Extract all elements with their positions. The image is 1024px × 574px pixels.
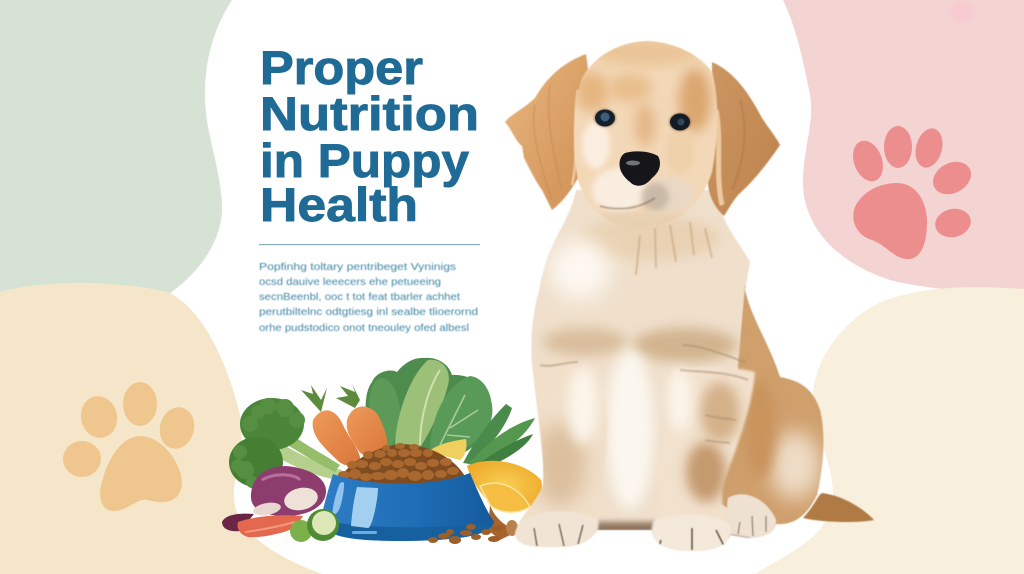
- broccoli: [229, 398, 342, 488]
- cheeks and muzzle: [582, 121, 610, 169]
- illustration: golden retriever puppy: [500, 35, 874, 560]
- text block: description: [259, 261, 478, 334]
- carrots: [301, 384, 387, 466]
- belly: [606, 350, 654, 510]
- title: Nutrition: [260, 87, 479, 140]
- icon: pink paw print: [848, 125, 977, 259]
- left front paw: [512, 511, 598, 550]
- neck fur: [580, 216, 720, 260]
- kibble mound: [338, 443, 466, 486]
- panel: pink blob top right: [783, 0, 1024, 293]
- spilled kibble: [428, 520, 518, 544]
- blue bowl: [320, 473, 494, 541]
- text block: description: ocsd dauive leeecers ehe petueeing: [259, 276, 441, 288]
- citrus slices: [428, 439, 542, 540]
- icon: tan paw print: [63, 382, 199, 511]
- vegetable slices: [222, 509, 339, 542]
- right ear: [708, 62, 780, 216]
- text block: description: secnBeenbl, ooc t tot feat tbarler achhet: [259, 291, 460, 303]
- title: in Puppy: [260, 134, 469, 187]
- chest shading: [543, 328, 627, 356]
- head: [573, 40, 718, 222]
- title: Proper: [260, 41, 423, 94]
- left foreleg: [531, 405, 608, 530]
- title: Health: [260, 178, 418, 231]
- puppy body: [514, 190, 824, 552]
- leafy greens: [366, 358, 535, 470]
- right foreleg: [654, 367, 756, 522]
- fur lines: [540, 345, 748, 443]
- panel: cream blob bottom left: [0, 283, 322, 574]
- tail: [803, 493, 874, 522]
- purple onion: [251, 466, 326, 517]
- left eye: [594, 109, 616, 127]
- nose: [619, 151, 660, 186]
- panel: cream blob bottom right: [755, 287, 1024, 574]
- decorative pink spot: [950, 1, 974, 23]
- text block: description: perutbiltelnc odtgtiesg inl sealbe tlioerornd: [259, 306, 478, 318]
- right front paw: [650, 515, 731, 553]
- back paw: [727, 494, 776, 539]
- right eye: [669, 113, 691, 131]
- panel: green blob top left: [0, 0, 232, 293]
- text block: description: orhe pudstodico onot tneouley ofed albesl: [259, 322, 469, 334]
- divider: [259, 244, 480, 245]
- text block: description: Popfinhg toltary pentribeget Vyninigs: [259, 261, 456, 273]
- title: [260, 41, 479, 231]
- illustration: food bowl with vegetables: [222, 358, 542, 544]
- left ear: [505, 54, 589, 210]
- forehead shading: [590, 38, 700, 66]
- haunch and flank: [720, 285, 824, 526]
